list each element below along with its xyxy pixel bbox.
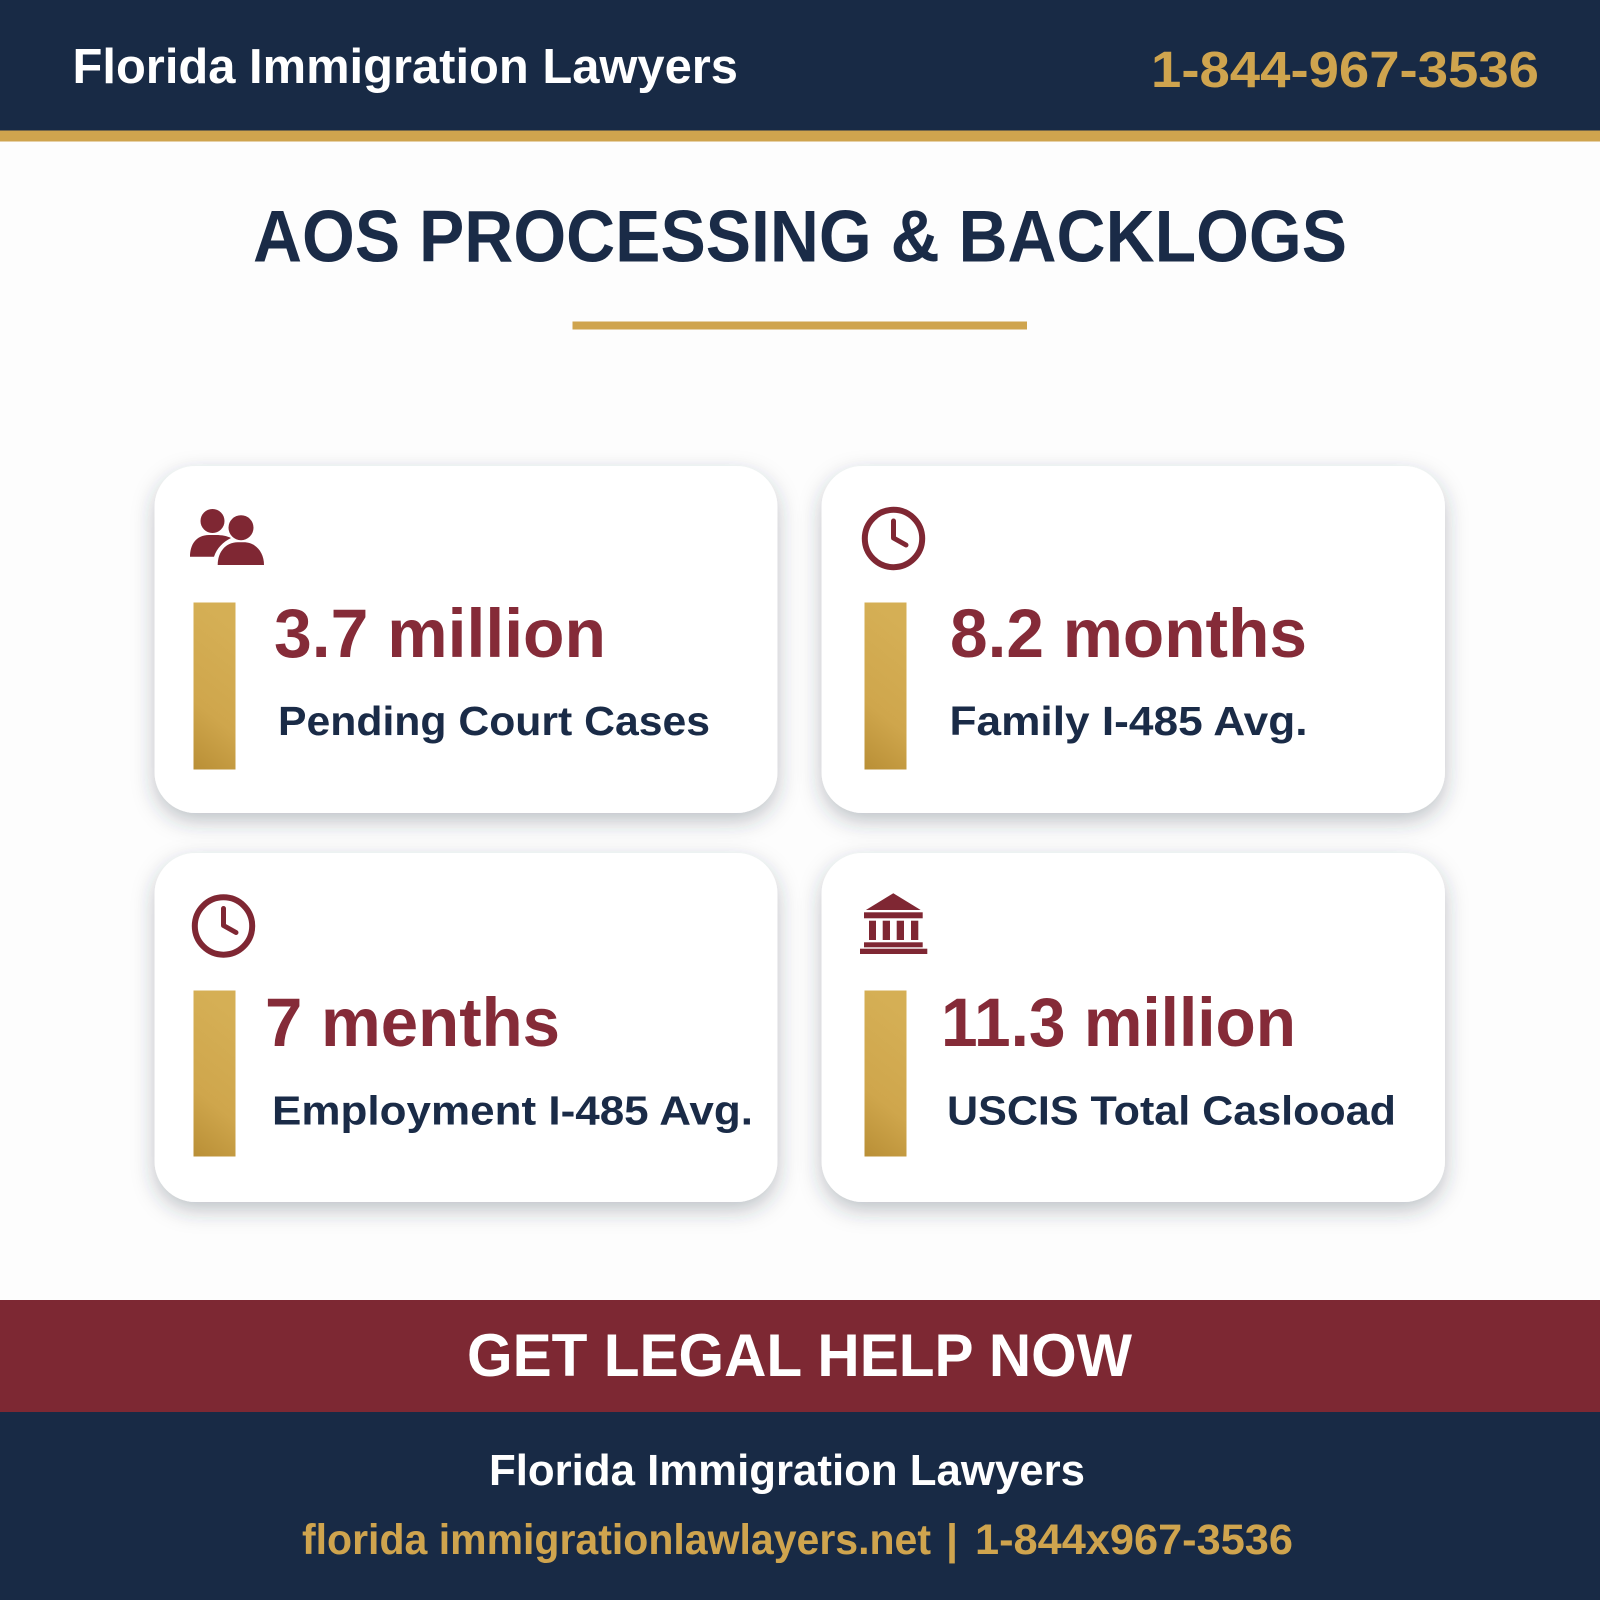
stat value: 7 menths bbox=[265, 984, 560, 1061]
header bar bbox=[0, 0, 1600, 142]
stat value: 3.7 million bbox=[274, 595, 606, 672]
stat value: 8.2 months bbox=[950, 595, 1307, 672]
footer contact line: 1-844x967-3536 bbox=[975, 1516, 1293, 1564]
footer contact line: florida immigrationlawlayers.net bbox=[302, 1516, 931, 1564]
footer bbox=[0, 1412, 1600, 1600]
panel: pending court cases bbox=[154, 466, 778, 813]
stat label: Family I-485 Avg. bbox=[950, 698, 1308, 744]
accent bar bbox=[194, 602, 236, 770]
stat label: Pending Court Cases bbox=[278, 698, 710, 744]
accent bar bbox=[864, 990, 906, 1156]
footer firm name: Florida Immigration Lawyers bbox=[489, 1446, 1085, 1495]
icon: courthouse bbox=[860, 893, 927, 954]
stat label: USCIS Total Caslooad bbox=[947, 1088, 1396, 1134]
call to action banner bbox=[0, 1300, 1600, 1412]
stat value: 11.3 million bbox=[941, 984, 1296, 1061]
icon: people bbox=[190, 509, 264, 565]
header firm name: Florida Immigration Lawyers bbox=[72, 40, 738, 94]
icon: clock bbox=[865, 510, 922, 567]
panel: family I-485 average bbox=[822, 466, 1445, 813]
header phone number: 1-844-967-3536 bbox=[1151, 41, 1539, 98]
accent bar bbox=[194, 990, 236, 1156]
footer contact line: | bbox=[946, 1516, 958, 1564]
accent bar bbox=[864, 602, 906, 770]
footer contact line bbox=[302, 1516, 1293, 1564]
stat label: Employment I-485 Avg. bbox=[272, 1088, 753, 1134]
icon: clock bbox=[195, 897, 252, 955]
panel: employment I-485 average bbox=[154, 853, 778, 1202]
call to action text: GET LEGAL HELP NOW bbox=[467, 1322, 1132, 1389]
panel: USCIS total caseload bbox=[822, 853, 1445, 1202]
title: AOS PROCESSING & BACKLOGS bbox=[253, 196, 1347, 278]
